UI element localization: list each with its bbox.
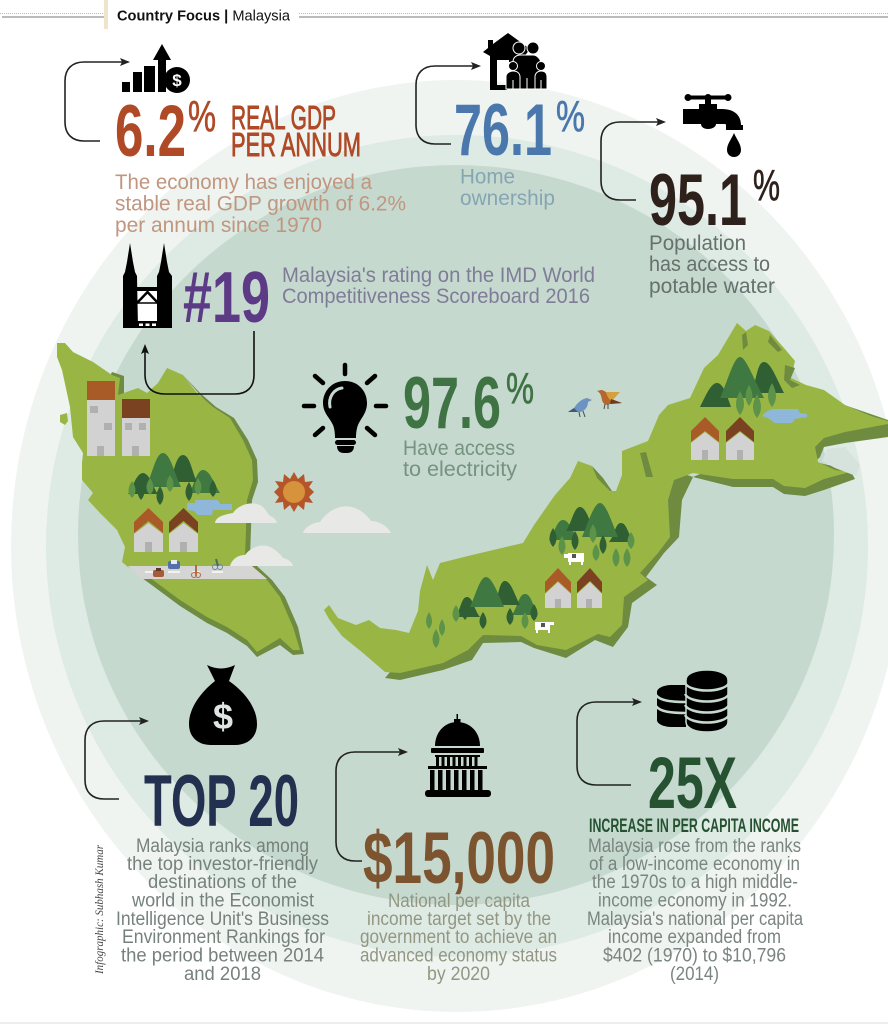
stat: 6.2% real GDP: REAL GDP	[231, 99, 336, 136]
description: Environment Rankings for	[122, 927, 326, 948]
houses	[134, 508, 198, 552]
description: Malaysia ranks among	[136, 836, 309, 857]
arrow	[601, 122, 660, 200]
stat: 97.6% electricity	[304, 363, 534, 481]
description: Competitiveness Scoreboard 2016	[282, 285, 590, 308]
description	[115, 171, 406, 237]
header bar	[0, 0, 888, 29]
description: Malaysia rose from the ranks	[588, 836, 801, 857]
stat: 25X per capita income	[577, 670, 803, 985]
description: to electricity	[403, 458, 518, 481]
description: potable water	[649, 275, 775, 298]
description: advanced economy status	[360, 946, 557, 966]
stat: $15,000 income target	[336, 714, 557, 985]
Sarawak scene south	[426, 577, 538, 648]
description: and 2018	[184, 964, 261, 985]
header bar: Country Focus | Malaysia	[117, 8, 291, 24]
icon: water tap	[683, 94, 743, 157]
stat: #19 competitiveness	[123, 243, 595, 394]
stat: top 20 investor-friendly: TOP 20	[144, 761, 299, 842]
stat: $15,000 income target: $15,000	[363, 818, 555, 899]
arrow	[577, 702, 636, 785]
arrow	[416, 66, 475, 144]
description	[460, 166, 555, 210]
tall buildings	[87, 381, 150, 456]
cow south	[535, 622, 554, 633]
description: destinations of the	[148, 872, 297, 893]
description: world in the Economist	[131, 890, 315, 912]
description	[649, 232, 775, 298]
description: Intelligence Unit's Business	[116, 909, 329, 930]
icon: growth chart with coin: $	[172, 71, 182, 90]
map: Peninsular Malaysia	[57, 343, 304, 657]
Sabah scene	[691, 357, 807, 460]
description: $402 (1970) to $10,796	[603, 946, 786, 966]
arrow	[145, 331, 254, 394]
lake	[187, 500, 232, 515]
stat: 6.2% real GDP: 6.2	[115, 91, 186, 172]
description: stable real GDP growth of 6.2%	[115, 192, 406, 216]
description: by 2020	[427, 964, 490, 985]
description: income expanded from	[608, 927, 781, 948]
description: ownership	[460, 187, 555, 210]
vehicles on road	[153, 559, 222, 578]
description	[403, 437, 518, 481]
stat: 6.2% real GDP	[65, 44, 406, 237]
icon: light bulb	[304, 365, 386, 453]
description: the 1970s to a high middle-	[592, 872, 798, 893]
description: per annum since 1970	[115, 214, 322, 237]
description: Malaysia's rating on the IMD World	[282, 264, 595, 287]
icon: government building	[425, 714, 491, 797]
stat: 25X per capita income: 25X	[648, 743, 737, 824]
icon: money bag	[189, 665, 257, 745]
icon: growth chart with coin	[122, 44, 190, 93]
stat: 95.1% potable water: 95.1	[649, 160, 747, 241]
description: The economy has enjoyed a	[115, 171, 372, 194]
description: (2014)	[670, 964, 719, 985]
cow north	[564, 553, 584, 565]
arrow	[85, 721, 143, 799]
description: income economy in 1992.	[598, 890, 792, 912]
stat: 76.1% home ownership	[416, 33, 585, 210]
stat: 6.2% real GDP: PER ANNUM	[231, 126, 361, 163]
icon: money bag: $	[213, 696, 233, 737]
stat: 95.1% potable water	[601, 94, 780, 298]
icon: coin stacks	[656, 670, 729, 732]
icon: Petronas towers	[123, 243, 172, 328]
stat: #19 competitiveness: #19	[183, 258, 270, 338]
description: government to achieve an	[360, 927, 557, 948]
description: has access to	[649, 253, 770, 276]
icon: sun	[274, 472, 314, 512]
stat: 76.1% home ownership: %	[556, 92, 585, 141]
arrow	[65, 62, 124, 141]
map: East Malaysia	[324, 323, 888, 680]
description: the top investor-friendly	[127, 854, 318, 875]
icon: birds	[568, 390, 622, 417]
description	[587, 836, 803, 985]
stat: 95.1% potable water: %	[753, 161, 780, 210]
description	[360, 891, 557, 985]
arrow	[336, 752, 402, 861]
clouds	[215, 503, 391, 566]
Sarawak scene north	[549, 503, 634, 567]
description: Home	[460, 166, 515, 188]
description: Have access	[403, 437, 515, 460]
description: Population	[649, 232, 746, 255]
credit: Infographic: Subhash Kumar	[94, 845, 106, 975]
stat: top 20 investor-friendly	[85, 665, 329, 985]
stat: 97.6% electricity: %	[506, 364, 534, 413]
description	[116, 836, 329, 985]
description: the period between 2014	[121, 946, 324, 966]
icon: home and family	[483, 33, 547, 90]
dark coast shading	[385, 400, 888, 680]
description: National per capita	[388, 891, 530, 912]
description: income target set by the	[367, 909, 551, 930]
description	[282, 264, 595, 308]
mountains and trees	[128, 453, 220, 505]
description: of a low-income economy in	[589, 854, 800, 875]
description: Malaysia's national per capita	[587, 909, 803, 930]
stat: 97.6% electricity: 97.6	[403, 363, 501, 444]
stat: 76.1% home ownership: 76.1	[454, 90, 552, 171]
road	[128, 566, 267, 579]
Sarawak houses	[545, 568, 602, 608]
stat: 6.2% real GDP: %	[188, 92, 216, 141]
